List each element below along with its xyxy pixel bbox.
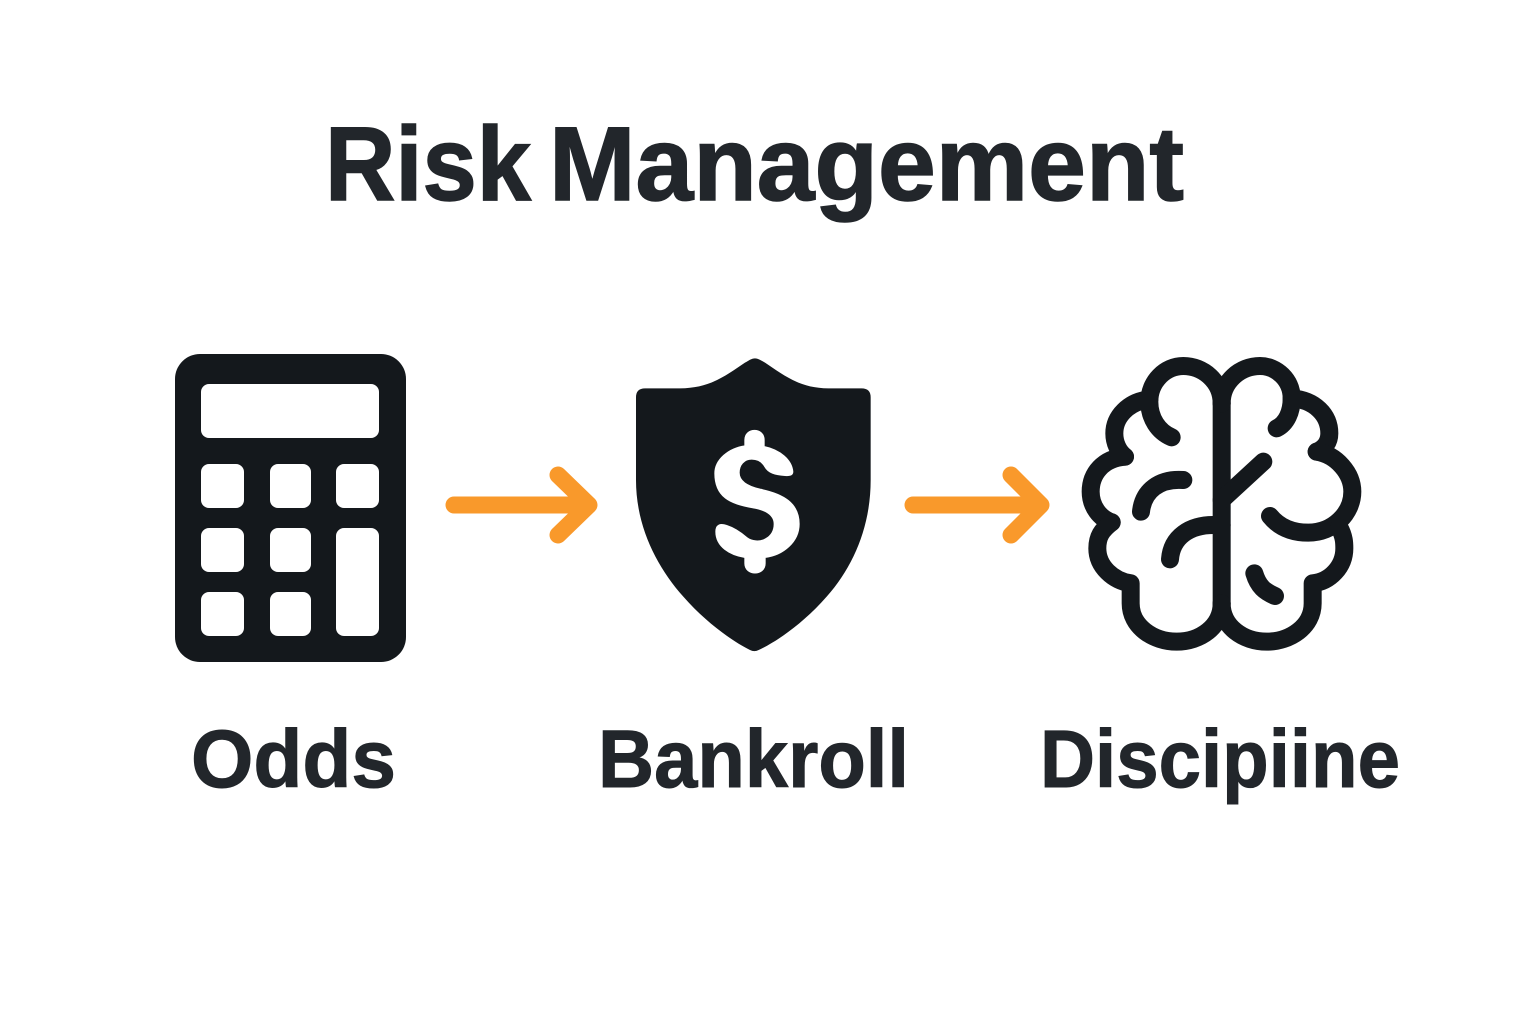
label: Bankroll: Bankroll <box>598 714 909 805</box>
title: Risk <box>325 106 532 223</box>
icon: brain <box>1091 366 1352 642</box>
title: Management <box>549 106 1184 223</box>
icon: shield with dollar <box>636 358 871 651</box>
label: Discipiine: Discipiine <box>1040 714 1400 805</box>
arrow: bankroll to discipline <box>913 475 1041 535</box>
label: Odds: Odds <box>191 714 396 805</box>
arrow: odds to bankroll <box>454 475 589 535</box>
icon: calculator <box>175 354 406 662</box>
